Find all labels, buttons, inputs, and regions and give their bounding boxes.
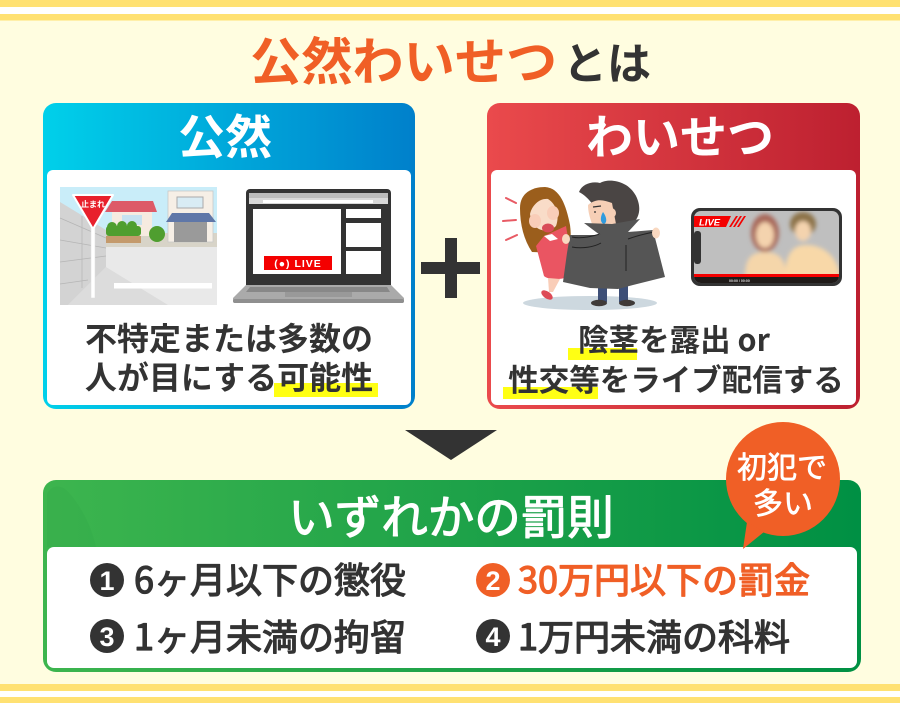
item 3: 3 [99,622,115,652]
illustration: laptop [233,189,404,303]
highlights [503,348,637,399]
title: 公然わいせつ [250,21,557,95]
text block: public description: 不特定または多数の [85,314,373,360]
text block: obscene description [508,316,844,400]
phone time label: 00:00 / 00:00 [729,279,750,283]
illustration: street scene [60,187,217,305]
arrow: down triangle [405,430,497,460]
item 2: 2 [485,566,501,596]
text block: obscene description: 性交等をライブ配信する [508,356,844,400]
heading: penalties: いずれかの罰則 [288,481,614,548]
illustration: phone live stream [691,208,842,286]
heading: obscene: わいせつ [586,99,774,168]
title: とは [563,28,651,92]
live label: (●) LIVE [274,258,322,270]
highlight [274,383,378,397]
illustration: exposure [503,181,665,310]
item 3: 1ヶ月未満の拘留 [134,609,406,661]
text block: obscene description: 陰茎を露出 or [578,316,771,360]
item 4: 1万円未満の科料 [518,609,790,661]
heading: public: 公然 [178,99,272,168]
panel: penalties [43,480,861,672]
item 1: 6ヶ月以下の懲役 [134,552,406,604]
plus sign [421,238,480,298]
text block: public description: 人が目にする可能性 [85,353,373,399]
item 2: 30万円以下の罰金 [518,552,810,604]
item 1: 1 [99,566,115,596]
text block: public description [85,314,373,399]
panel: public [43,99,415,409]
callout: often first offence: 初犯で [737,443,827,487]
item 4: 4 [485,622,501,652]
callout: often first offence [726,422,840,549]
panel: obscene [487,99,860,409]
phone live label: LIVE [699,218,721,228]
sign label: 止まれ [81,199,105,210]
callout: often first offence: 多い [753,479,813,523]
